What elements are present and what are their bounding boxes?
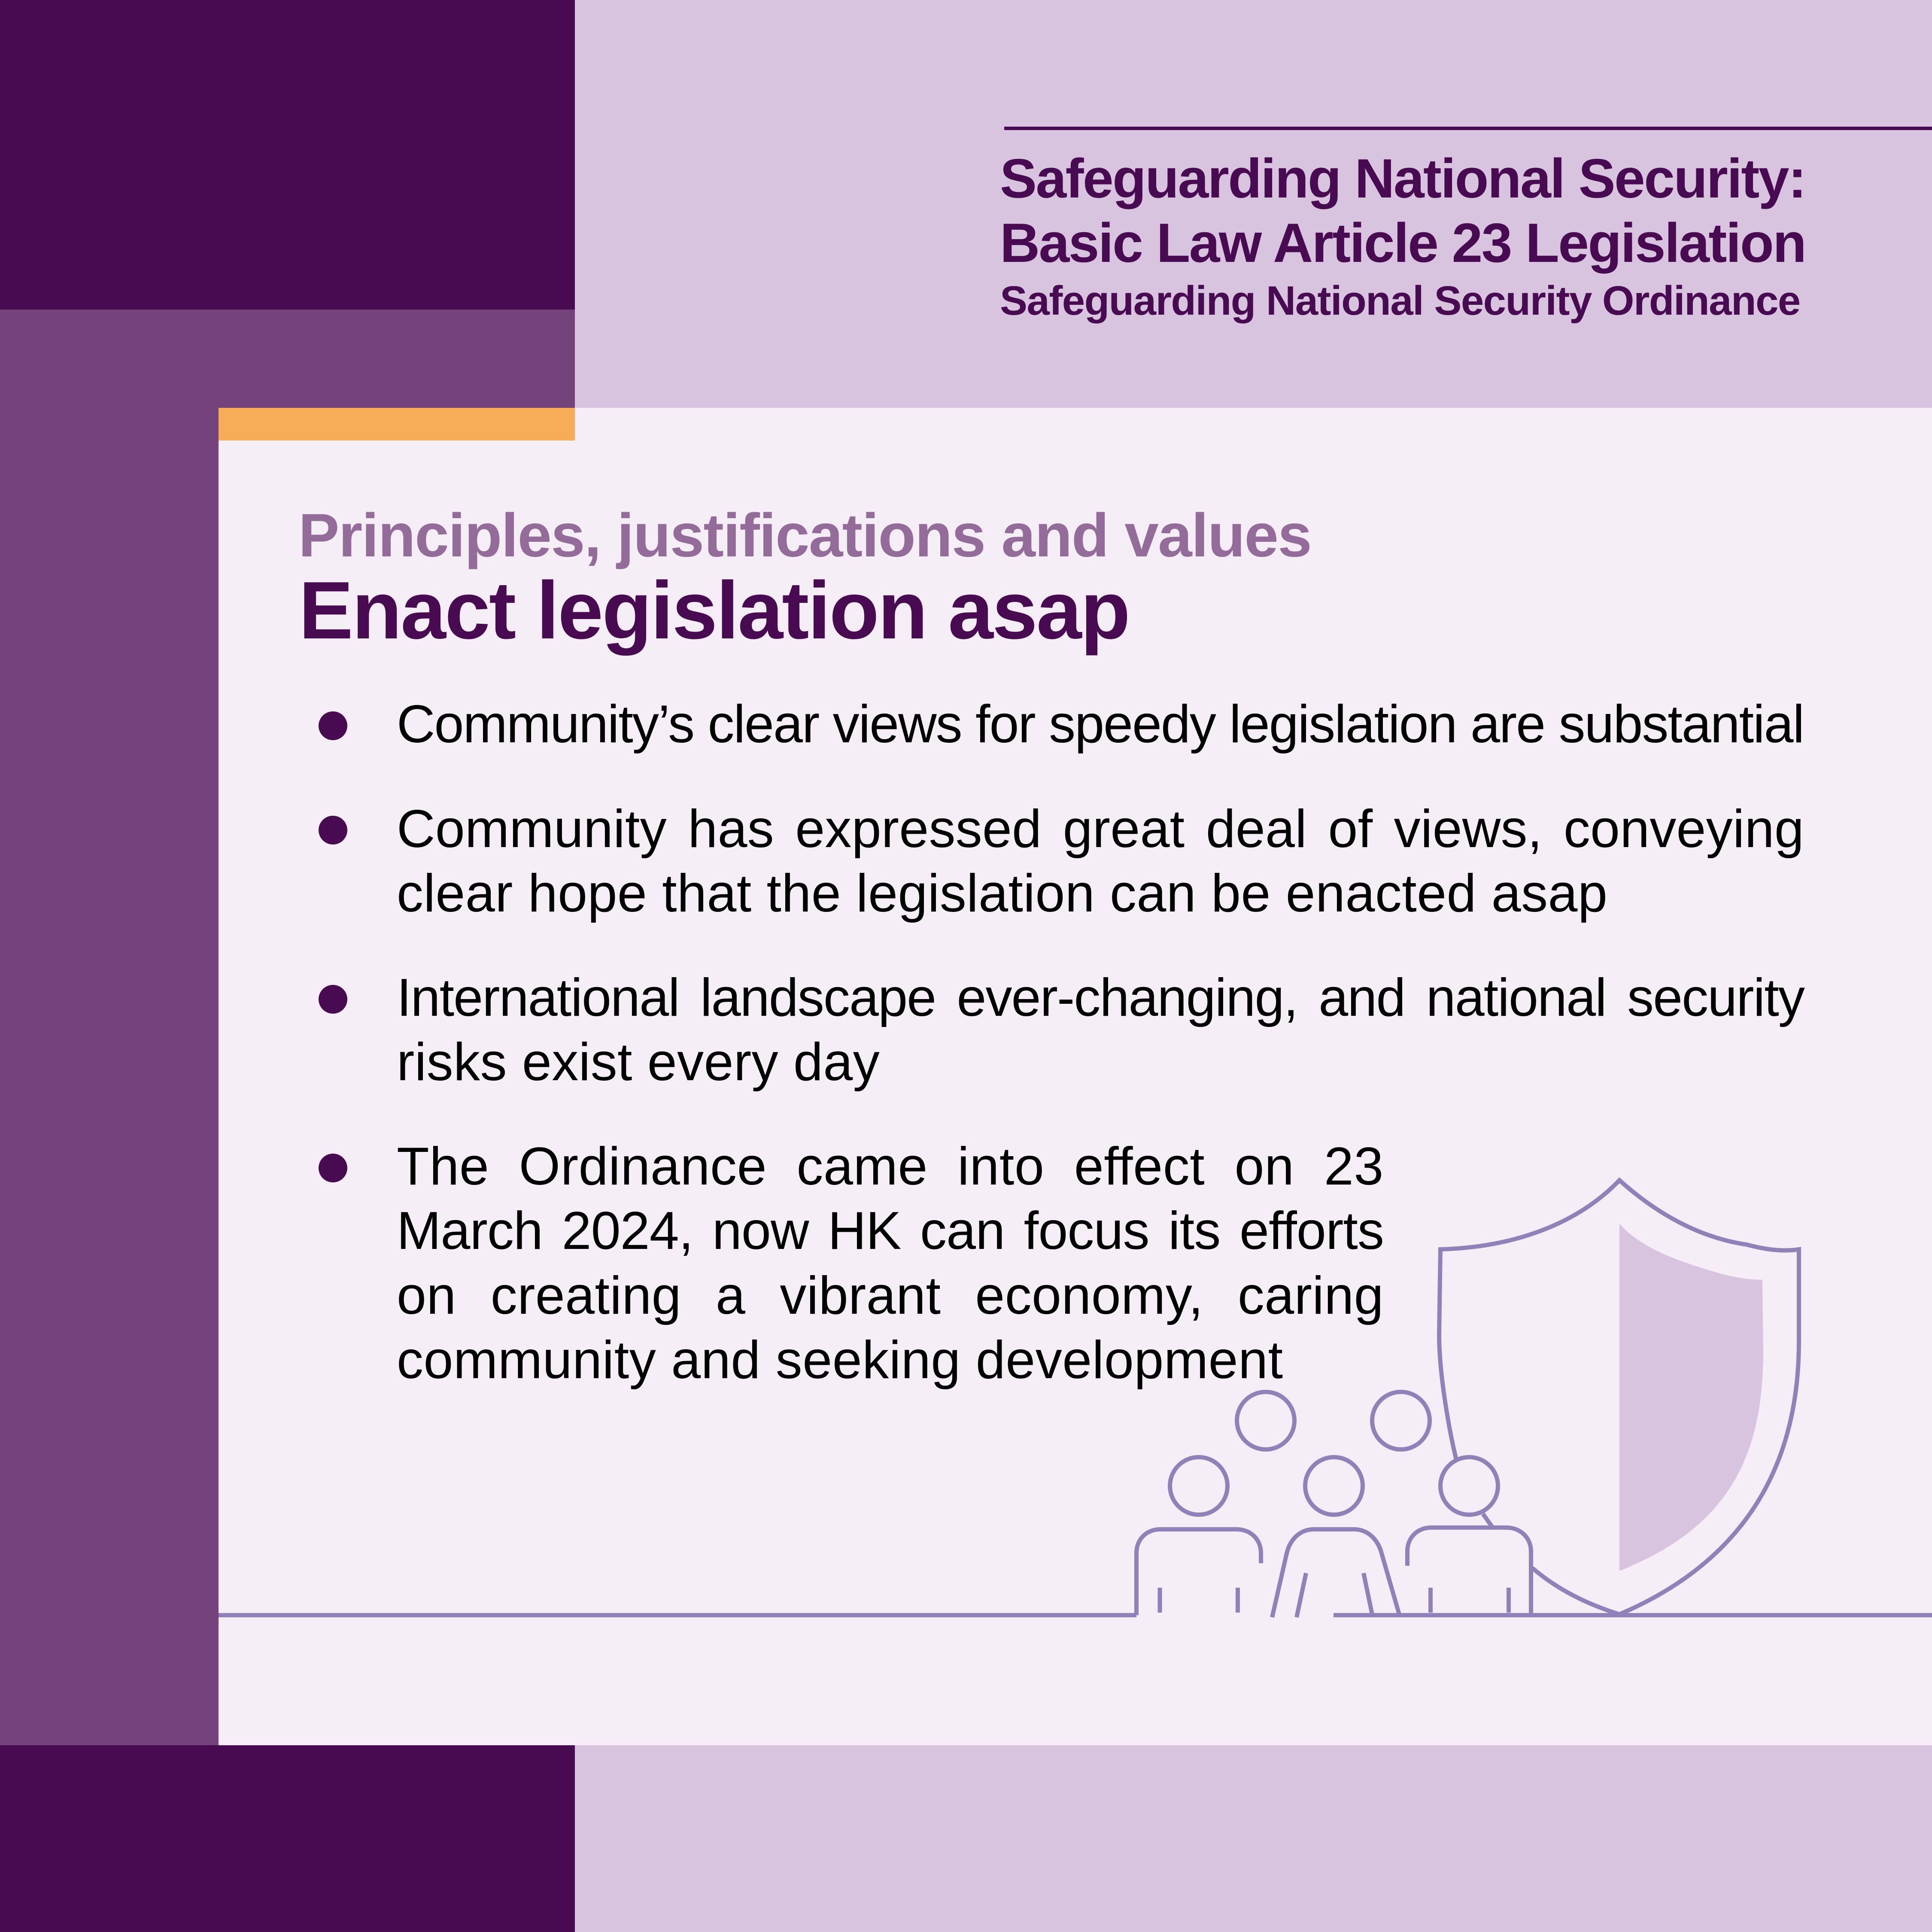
icon: shield — [1439, 1180, 1799, 1614]
bullet text 4 — [0, 1134, 1417, 1392]
bullet list — [0, 0, 1932, 1417]
mid-purple top band — [0, 310, 575, 408]
bullet text 2: clear hope that the legislation can be enacted asap — [397, 864, 1607, 923]
bullet text 3: International landscape ever-changing, and national security — [397, 968, 1804, 1027]
orange accent bar — [219, 408, 575, 440]
bullet text 4: March 2024, now HK can focus its efforts — [397, 1201, 1384, 1261]
top-left dark block — [0, 0, 575, 310]
main content panel — [219, 408, 1932, 1745]
bullet text 2: Community has expressed great deal of views, conveying — [397, 799, 1804, 859]
bullet text 1: Community’s clear views for speedy legislation are substantial — [397, 695, 1804, 754]
header rule — [1004, 127, 1932, 130]
icon: person front centre — [1272, 1457, 1399, 1617]
bullet text 2 — [0, 797, 1932, 926]
header title — [1000, 142, 1932, 331]
bullet text 4: on creating a vibrant economy, caring — [397, 1266, 1384, 1325]
section kicker: Principles, justifications and values — [298, 501, 1311, 570]
header subtitle: Safeguarding National Security Ordinance — [1000, 278, 1800, 324]
bullet text 4: community and seeking development — [397, 1331, 1283, 1390]
bullet marker 3 — [319, 985, 347, 1014]
ground line — [219, 1613, 1932, 1617]
bullet marker 4 — [319, 1154, 347, 1182]
icon: person front right — [1407, 1457, 1531, 1614]
icon: person back left — [1237, 1392, 1294, 1449]
bullet text 3 — [0, 966, 1932, 1094]
bottom-left dark block — [0, 1745, 575, 1932]
bullet text 4: The Ordinance came into effect on 23 — [397, 1137, 1384, 1196]
section heading: Enact legislation asap — [299, 565, 1129, 656]
header title line 2: Basic Law Article 23 Legislation — [1000, 212, 1805, 274]
icon: person back right — [1372, 1392, 1430, 1449]
mid-purple left column — [0, 408, 219, 1745]
header title line 1: Safeguarding National Security: — [1000, 148, 1805, 210]
icon: person front left — [1136, 1457, 1261, 1615]
bullet marker 1 — [319, 711, 347, 740]
bullet text 3: risks exist every day — [397, 1033, 880, 1092]
bullet marker 2 — [319, 816, 347, 844]
